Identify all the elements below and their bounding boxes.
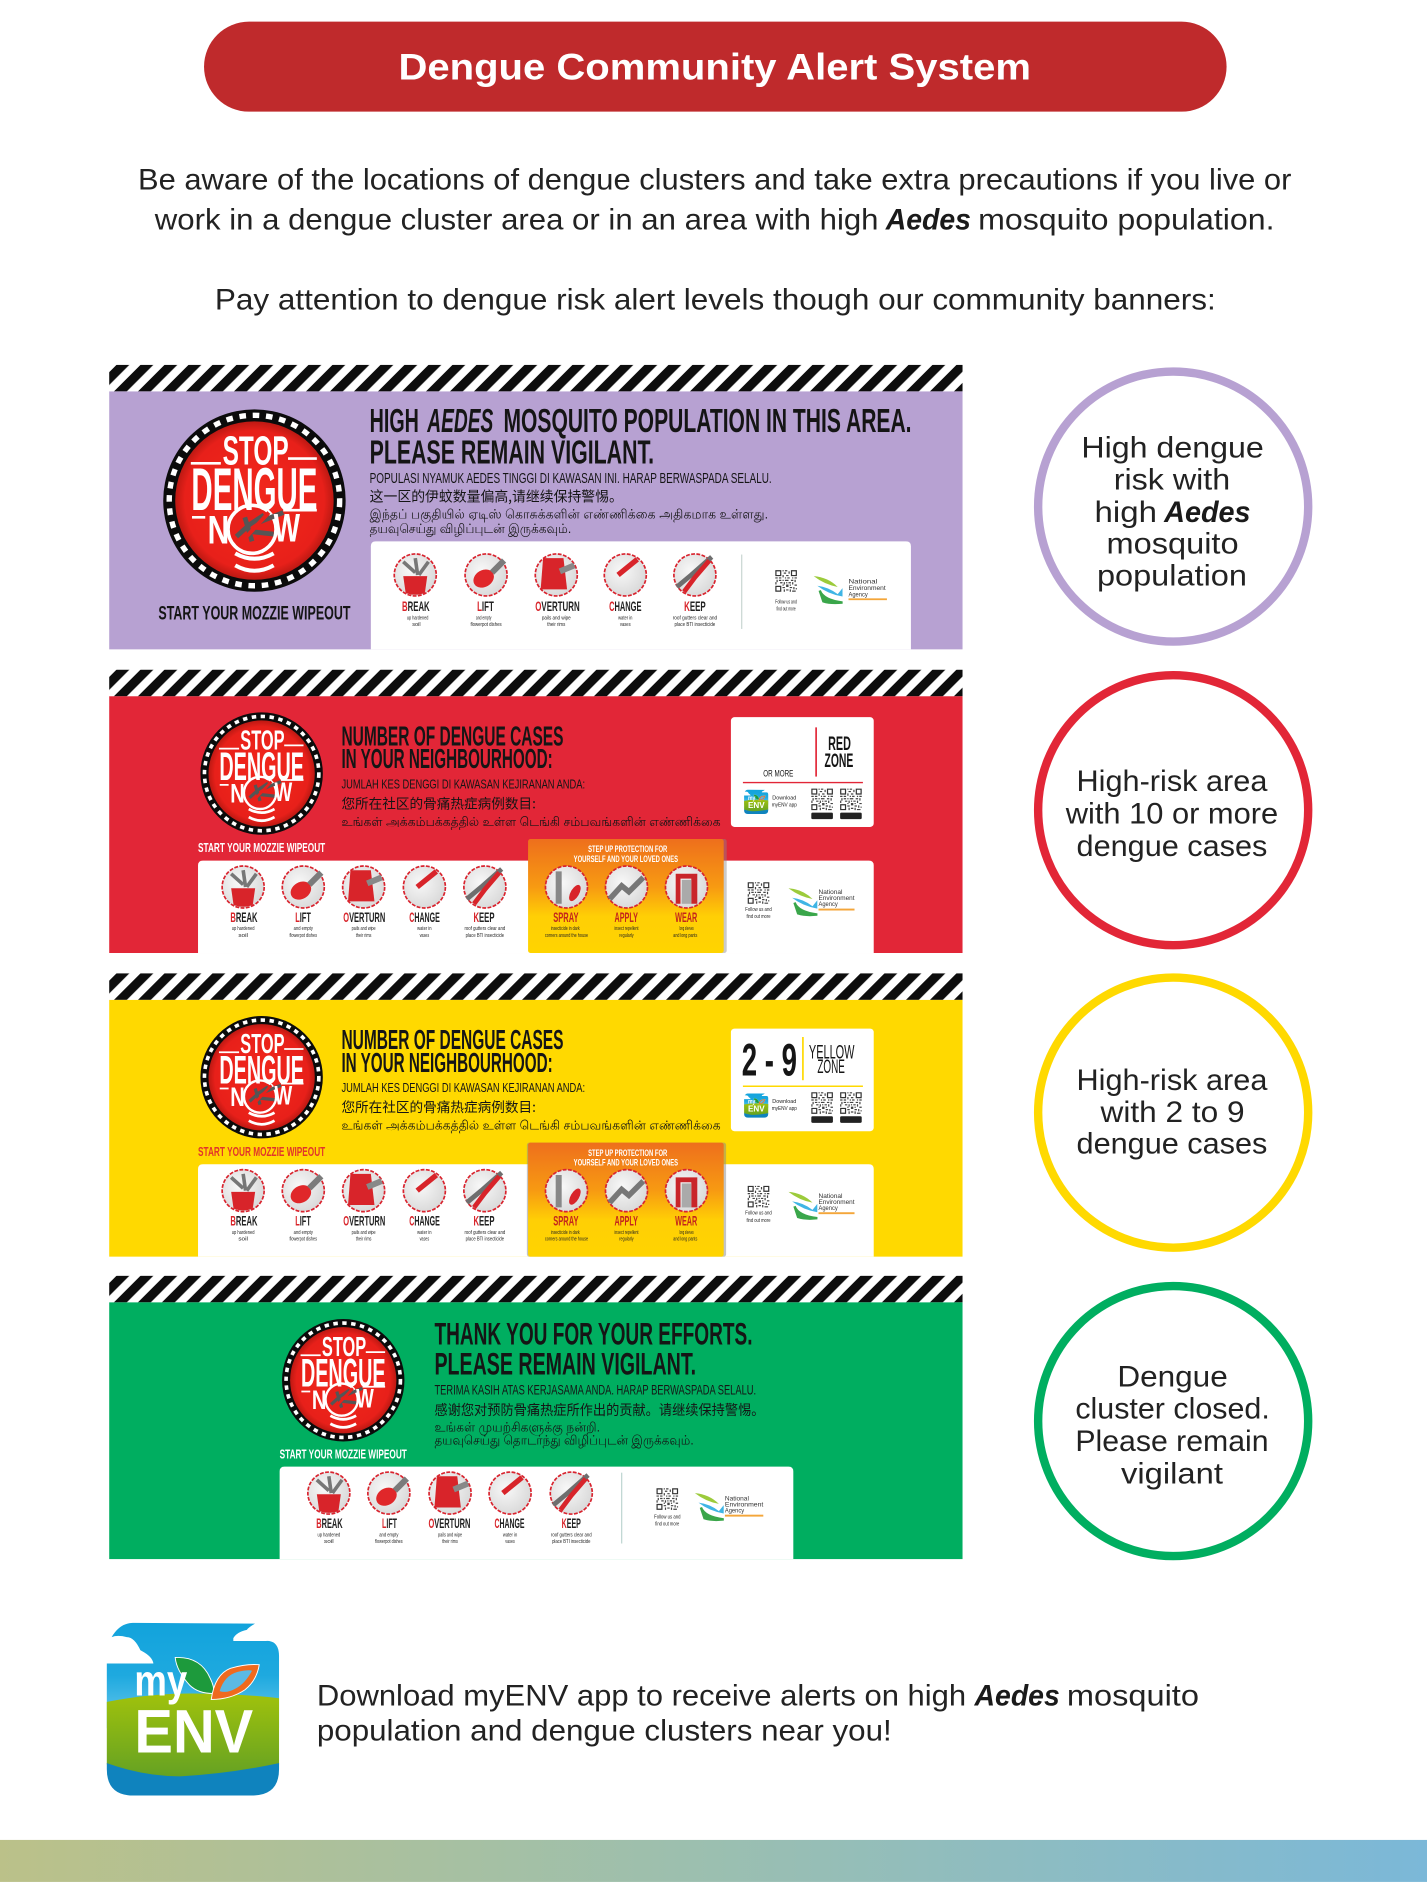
translations: உங்கள் அக்கம்பக்கத்தில் உள்ள டெங்கி சம்பவங்களின் எண்ணிக்கை xyxy=(341,1118,721,1132)
card: mozzie wipeout steps: LIFT xyxy=(295,910,311,925)
card: mozzie wipeout steps: CHANGE xyxy=(409,910,440,925)
card: mozzie wipeout steps: Environment xyxy=(849,585,886,592)
badge: stop dengue now: W xyxy=(275,1081,293,1111)
panel: yellow banner xyxy=(109,973,963,1257)
circle: high-risk 2 to 9 xyxy=(1038,978,1308,1248)
card: mozzie wipeout steps: soil xyxy=(412,622,421,628)
circle: cluster closed: Dengue xyxy=(1117,1360,1228,1393)
panel: red banner xyxy=(109,670,963,953)
card: step up protection: insect repellent xyxy=(614,1230,639,1236)
heading: NUMBER OF DENGUE CASES xyxy=(341,1024,563,1055)
footer text: mosquito xyxy=(1067,1680,1199,1713)
card: mozzie wipeout steps: OVERTURN xyxy=(428,1516,470,1531)
circle: cluster closed xyxy=(1038,1286,1308,1556)
card: mozzie wipeout steps: and empty xyxy=(294,926,313,932)
card: yellow zone: YELLOW xyxy=(809,1043,855,1064)
slogan: START YOUR MOZZIE WIPEOUT xyxy=(198,1145,325,1159)
card: mozzie wipeout steps: vases xyxy=(420,1236,429,1242)
translations: 您所在社区的骨痛热症病例数目: xyxy=(341,1096,536,1116)
card: mozzie wipeout steps: pails and wipe xyxy=(352,926,376,932)
title pill xyxy=(204,22,1227,112)
circle: high aedes population: high xyxy=(1095,496,1157,529)
card: mozzie wipeout steps: Follow us and xyxy=(745,907,772,913)
card: yellow zone: myENV app xyxy=(772,1106,797,1112)
card: step up protection xyxy=(527,1143,726,1257)
card: mozzie wipeout steps: up hardened xyxy=(232,1230,255,1236)
slogan: START YOUR MOZZIE WIPEOUT xyxy=(280,1447,407,1461)
card: red zone: myENV app xyxy=(772,803,797,809)
card: mozzie wipeout steps: OVERTURN xyxy=(343,1213,385,1228)
card: mozzie wipeout steps: roof gutters clear and xyxy=(673,615,717,621)
translations: TERIMA KASIH ATAS KERJASAMA ANDA. HARAP BERWASPADA SELALU. xyxy=(434,1383,756,1398)
translations: JUMLAH KES DENGGI DI KAWASAN KEJIRANAN ANDA: xyxy=(341,777,585,792)
translations: 这一区的伊蚊数量偏高,请继续保持警惕。 xyxy=(370,486,623,507)
card: mozzie wipeout steps: Environment xyxy=(725,1501,764,1508)
card: step up protection xyxy=(528,839,727,953)
card: yellow zone: Download xyxy=(772,1099,796,1105)
card: step up protection: long sleeves xyxy=(679,926,694,932)
card: mozzie wipeout steps: OVERTURN xyxy=(343,910,385,925)
circle: cluster closed: cluster closed. xyxy=(1075,1393,1270,1426)
card: mozzie wipeout steps: water in xyxy=(416,926,432,932)
translations: தயவுசெய்து தொடர்ந்து விழிப்புடன் இருக்கவும். xyxy=(434,1432,694,1448)
badge: stop dengue now: W xyxy=(274,506,300,550)
card: step up protection: YOURSELF AND YOUR LOVED ONES xyxy=(574,1157,678,1167)
card: mozzie wipeout steps: pails and wipe xyxy=(352,1230,376,1236)
circle: high aedes population: High dengue xyxy=(1081,431,1264,464)
panel: green banner xyxy=(109,1276,963,1559)
card: mozzie wipeout steps: Follow us and xyxy=(654,1514,680,1520)
card: mozzie wipeout steps: National xyxy=(725,1495,749,1502)
badge: stop dengue now: DENGUE xyxy=(301,1351,386,1396)
card: mozzie wipeout steps: CHANGE xyxy=(409,1213,440,1228)
translations: உங்கள் முயற்சிகளுக்கு நன்றி. xyxy=(434,1419,600,1435)
heading: PLEASE REMAIN VIGILANT. xyxy=(434,1346,696,1381)
card: mozzie wipeout steps: find out more xyxy=(747,914,771,920)
card: mozzie wipeout steps: LIFT xyxy=(382,1516,397,1531)
translations xyxy=(341,1080,721,1132)
card: mozzie wipeout steps: and empty xyxy=(379,1532,399,1538)
footer text: Aedes xyxy=(974,1680,1060,1713)
card: mozzie wipeout steps: Agency xyxy=(725,1507,745,1514)
card: red zone: Download xyxy=(772,795,796,801)
badge: stop dengue now: N xyxy=(312,1385,326,1415)
card: step up protection: WEAR xyxy=(675,1213,697,1228)
card: mozzie wipeout steps: their rims xyxy=(356,1236,372,1242)
card: step up protection: and long pants xyxy=(673,1236,697,1242)
card: mozzie wipeout steps: National xyxy=(819,889,843,896)
card: mozzie wipeout steps xyxy=(371,541,911,649)
card: mozzie wipeout steps: and empty xyxy=(476,615,492,621)
circle: cluster closed: vigilant xyxy=(1121,1457,1223,1490)
card: mozzie wipeout steps: Environment xyxy=(819,895,855,902)
footer text: population and dengue clusters near you! xyxy=(317,1714,892,1747)
card: mozzie wipeout steps: BREAK xyxy=(230,1213,257,1228)
badge: stop dengue now xyxy=(282,1319,404,1441)
card: yellow zone xyxy=(731,1029,874,1131)
card: yellow zone: ZONE xyxy=(817,1057,845,1078)
heading xyxy=(341,720,563,774)
card: mozzie wipeout steps xyxy=(280,1467,793,1559)
heading xyxy=(434,1316,753,1381)
badge: stop dengue now: STOP xyxy=(223,428,289,474)
card: mozzie wipeout steps: flowerpot dishes xyxy=(289,933,317,939)
translations xyxy=(370,471,772,537)
card: yellow zone: 2 - 9 xyxy=(742,1034,797,1085)
intro text xyxy=(138,164,1292,317)
card: mozzie wipeout steps: soil xyxy=(238,1236,248,1242)
card: mozzie wipeout steps: roof gutters clear and xyxy=(551,1532,592,1538)
card: mozzie wipeout steps xyxy=(198,1164,874,1257)
heading: NUMBER OF DENGUE CASES xyxy=(341,720,563,751)
circle: high-risk 10 or more xyxy=(1038,675,1308,945)
card: red zone xyxy=(731,717,874,827)
card: mozzie wipeout steps: their rims xyxy=(356,933,372,939)
card: mozzie wipeout steps: Agency xyxy=(819,1205,838,1212)
badge: stop dengue now: N xyxy=(230,779,245,809)
card: step up protection: and long pants xyxy=(673,933,697,939)
translations: உங்கள் அக்கம்பக்கத்தில் உள்ள டெங்கி சம்பவங்களின் எண்ணிக்கை xyxy=(341,815,721,829)
badge: stop dengue now: DENGUE xyxy=(191,456,317,523)
card: mozzie wipeout steps: find out more xyxy=(655,1521,679,1527)
circle: high aedes population xyxy=(1038,372,1308,642)
badge: stop dengue now: STOP xyxy=(240,1028,285,1059)
footer text: Download myENV app to receive alerts on high xyxy=(317,1680,966,1713)
card: mozzie wipeout steps: water in xyxy=(416,1230,432,1236)
card: step up protection: YOURSELF AND YOUR LOVED ONES xyxy=(574,854,678,864)
heading: THANK YOU FOR YOUR EFFORTS. xyxy=(434,1316,753,1351)
footer text xyxy=(317,1680,1199,1747)
card: mozzie wipeout steps: LIFT xyxy=(477,599,494,614)
panel: purple banner xyxy=(109,365,963,649)
heading: IN YOUR NEIGHBOURHOOD: xyxy=(341,743,553,774)
card: mozzie wipeout steps: vases xyxy=(505,1539,515,1545)
card: mozzie wipeout steps: place BTI insecticide xyxy=(466,1236,504,1242)
card: red zone: ZONE xyxy=(825,751,853,772)
heading xyxy=(370,403,912,471)
card: mozzie wipeout steps: roof gutters clear and xyxy=(464,926,505,932)
card: mozzie wipeout steps: vases xyxy=(420,933,429,939)
badge: stop dengue now: STOP xyxy=(240,724,285,755)
card: mozzie wipeout steps: flowerpot dishes xyxy=(375,1539,403,1545)
intro text: Be aware of the locations of dengue clusters and take extra precautions if you live or xyxy=(138,164,1292,197)
circle: high aedes population: mosquito xyxy=(1107,527,1239,560)
intro text: work in a dengue cluster area or in an area with high xyxy=(154,203,879,236)
circle: high-risk 10 or more: with 10 or more xyxy=(1065,797,1278,830)
badge: stop dengue now: DENGUE xyxy=(219,744,304,789)
circle: high-risk 2 to 9: dengue cases xyxy=(1077,1127,1267,1160)
circle: high aedes population: risk with xyxy=(1114,464,1230,497)
card: step up protection: APPLY xyxy=(614,1213,638,1228)
translations: தயவுசெய்து விழிப்புடன் இருக்கவும். xyxy=(370,521,571,537)
card: mozzie wipeout steps: vases xyxy=(620,622,631,628)
card: mozzie wipeout steps: Environment xyxy=(819,1199,855,1206)
card: mozzie wipeout steps: place BTI insecticide xyxy=(674,622,715,628)
card: mozzie wipeout steps: KEEP xyxy=(473,910,494,925)
badge: stop dengue now: DENGUE xyxy=(219,1048,304,1093)
card: mozzie wipeout steps: find out more xyxy=(747,1218,771,1224)
circle: high aedes population: population xyxy=(1097,560,1247,593)
badge: stop dengue now: N xyxy=(208,509,229,553)
card: mozzie wipeout steps: pails and wipe xyxy=(438,1532,462,1538)
card: mozzie wipeout steps: up hardened xyxy=(407,615,428,621)
card: mozzie wipeout steps: up hardened xyxy=(232,926,255,932)
circle: high-risk 10 or more: dengue cases xyxy=(1077,830,1267,863)
card: step up protection: APPLY xyxy=(614,910,638,925)
card: step up protection: regularly xyxy=(619,1236,634,1242)
card: mozzie wipeout steps: flowerpot dishes xyxy=(289,1236,317,1242)
circle: high-risk 2 to 9: High-risk area xyxy=(1077,1064,1268,1097)
card: mozzie wipeout steps: roof gutters clear and xyxy=(464,1230,505,1236)
card: mozzie wipeout steps: flowerpot dishes xyxy=(470,622,502,628)
card: step up protection: corners around the house xyxy=(545,933,588,939)
translations xyxy=(434,1383,765,1448)
heading: HIGH xyxy=(370,403,419,440)
slogan: START YOUR MOZZIE WIPEOUT xyxy=(158,603,351,624)
intro text: Pay attention to dengue risk alert levels though our community banners: xyxy=(215,284,1216,317)
card: mozzie wipeout steps: KEEP xyxy=(473,1213,494,1228)
slogan: START YOUR MOZZIE WIPEOUT xyxy=(198,841,325,855)
card: mozzie wipeout steps: place BTI insecticide xyxy=(552,1539,590,1545)
card: mozzie wipeout steps: LIFT xyxy=(295,1213,311,1228)
card: step up protection: WEAR xyxy=(675,910,697,925)
card: mozzie wipeout steps xyxy=(198,861,874,953)
card: mozzie wipeout steps: Agency xyxy=(849,592,868,599)
card: step up protection: regularly xyxy=(619,933,634,939)
circle: cluster closed: Please remain xyxy=(1075,1425,1269,1458)
icon: myENV app logo xyxy=(107,1623,279,1796)
heading xyxy=(341,1024,563,1078)
heading: MOSQUITO POPULATION IN THIS AREA. xyxy=(503,403,912,440)
card: step up protection: insecticide in dark xyxy=(551,1230,580,1236)
card: step up protection: long sleeves xyxy=(679,1230,694,1236)
translations: 感谢您对预防骨痛热症所作出的贡献。请继续保持警惕。 xyxy=(434,1399,765,1420)
badge: stop dengue now: STOP xyxy=(322,1331,366,1362)
card: mozzie wipeout steps: soil xyxy=(324,1539,334,1545)
card: mozzie wipeout steps: BREAK xyxy=(316,1516,343,1531)
heading: AEDES xyxy=(427,403,494,440)
card: mozzie wipeout steps: their rims xyxy=(547,622,565,628)
title pill: Dengue Community Alert System xyxy=(398,45,1031,87)
card: mozzie wipeout steps: up hardened xyxy=(317,1532,340,1538)
translations xyxy=(341,777,721,829)
card: mozzie wipeout steps: water in xyxy=(502,1532,517,1538)
card: step up protection: insect repellent xyxy=(614,926,639,932)
translations: இந்தப் பகுதியில் ஏடிஸ் கொசுக்களின் எண்ணிக்கை அதிகமாக உள்ளது. xyxy=(370,507,768,523)
card: mozzie wipeout steps: Follow us and xyxy=(745,1211,772,1217)
card: step up protection: STEP UP PROTECTION FOR xyxy=(588,1148,668,1158)
badge: stop dengue now xyxy=(200,1016,323,1138)
card: mozzie wipeout steps: OVERTURN xyxy=(535,599,580,614)
badge: stop dengue now xyxy=(200,712,323,835)
card: mozzie wipeout steps: CHANGE xyxy=(494,1516,524,1531)
card: mozzie wipeout steps: water in xyxy=(617,615,632,621)
card: mozzie wipeout steps: soil xyxy=(238,933,248,939)
card: step up protection: SPRAY xyxy=(553,910,578,925)
card: mozzie wipeout steps: KEEP xyxy=(562,1516,581,1531)
badge: stop dengue now xyxy=(163,409,346,592)
badge: stop dengue now: W xyxy=(275,777,293,807)
card: step up protection: SPRAY xyxy=(553,1213,578,1228)
footer colour bar xyxy=(0,1840,1427,1882)
badge: stop dengue now: N xyxy=(230,1082,245,1112)
card: red zone: OR MORE xyxy=(763,769,793,780)
card: mozzie wipeout steps: place BTI insecticide xyxy=(466,933,504,939)
card: mozzie wipeout steps: Agency xyxy=(819,901,838,908)
badge: stop dengue now: W xyxy=(356,1384,375,1414)
card: step up protection: insecticide in dark xyxy=(551,926,580,932)
circle: high-risk 10 or more: High-risk area xyxy=(1077,765,1268,798)
translations: 您所在社区的骨痛热症病例数目: xyxy=(341,792,536,812)
circle: high aedes population: Aedes xyxy=(1163,496,1251,529)
card: mozzie wipeout steps: pails and wipe xyxy=(542,615,571,621)
card: mozzie wipeout steps: KEEP xyxy=(684,599,706,614)
intro text: Aedes xyxy=(885,203,971,236)
card: step up protection: corners around the house xyxy=(545,1236,588,1242)
card: mozzie wipeout steps: Follow us and xyxy=(775,600,797,606)
intro text: mosquito population. xyxy=(978,203,1275,236)
translations: POPULASI NYAMUK AEDES TINGGI DI KAWASAN INI. HARAP BERWASPADA SELALU. xyxy=(370,471,772,487)
card: red zone: RED xyxy=(828,734,851,755)
card: mozzie wipeout steps: BREAK xyxy=(230,910,257,925)
card: mozzie wipeout steps: find out more xyxy=(777,606,796,612)
circle: high-risk 2 to 9: with 2 to 9 xyxy=(1099,1096,1245,1129)
card: mozzie wipeout steps: National xyxy=(849,578,877,585)
card: mozzie wipeout steps: CHANGE xyxy=(609,599,641,614)
translations: JUMLAH KES DENGGI DI KAWASAN KEJIRANAN ANDA: xyxy=(341,1080,585,1095)
heading: IN YOUR NEIGHBOURHOOD: xyxy=(341,1047,553,1078)
card: mozzie wipeout steps: BREAK xyxy=(402,599,430,614)
card: mozzie wipeout steps: National xyxy=(819,1193,843,1200)
card: mozzie wipeout steps: their rims xyxy=(442,1539,458,1545)
heading: PLEASE REMAIN VIGILANT. xyxy=(370,434,654,471)
card: step up protection: STEP UP PROTECTION FOR xyxy=(588,844,668,854)
card: mozzie wipeout steps: and empty xyxy=(294,1230,313,1236)
